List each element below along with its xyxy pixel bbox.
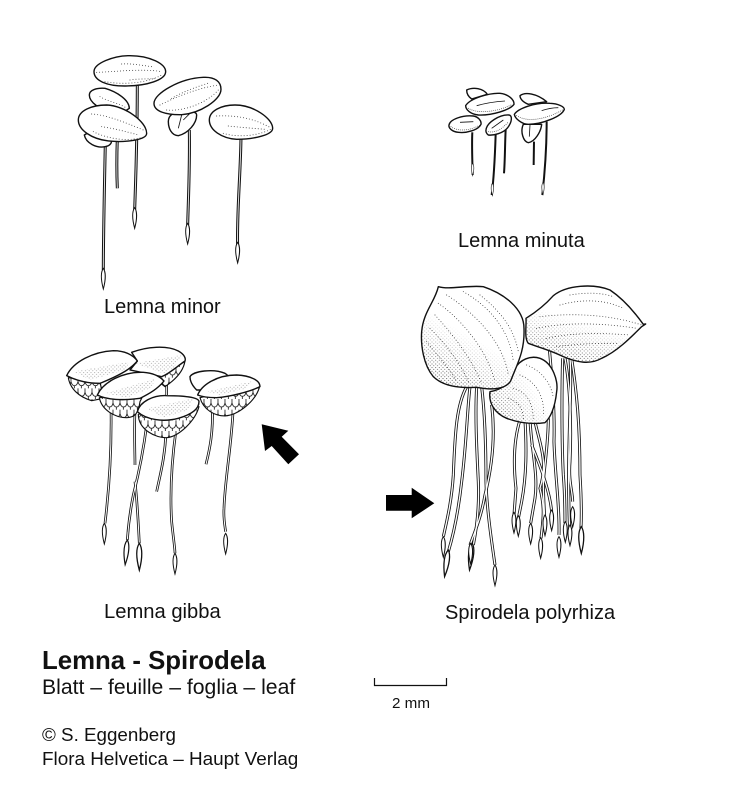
credit: publication: Flora Helvetica – Haupt Verlag — [42, 749, 298, 770]
arrow: pointing at Lemna gibba — [262, 424, 299, 464]
scale bar: 2 mm — [392, 695, 430, 712]
illustration: Lemna minor — [78, 56, 273, 289]
illustration: Lemna gibba — [67, 347, 260, 574]
scale bar — [374, 678, 446, 712]
subtitle: leaf in four languages: Blatt – feuille – foglia – leaf — [42, 676, 295, 699]
label: Spirodela polyrhiza: Spirodela polyrhiza — [445, 602, 616, 624]
arrow: pointing at Spirodela polyrhiza — [386, 488, 434, 518]
title: Lemna - Spirodela — [42, 647, 266, 675]
label: Lemna gibba: Lemna gibba — [104, 601, 222, 623]
label: Lemna minor: Lemna minor — [104, 296, 221, 318]
label: Lemna minuta: Lemna minuta — [458, 230, 586, 252]
illustration: Lemna minuta — [449, 88, 564, 196]
credit: author: © S. Eggenberg — [42, 724, 176, 745]
illustration: Spirodela polyrhiza — [421, 286, 646, 586]
